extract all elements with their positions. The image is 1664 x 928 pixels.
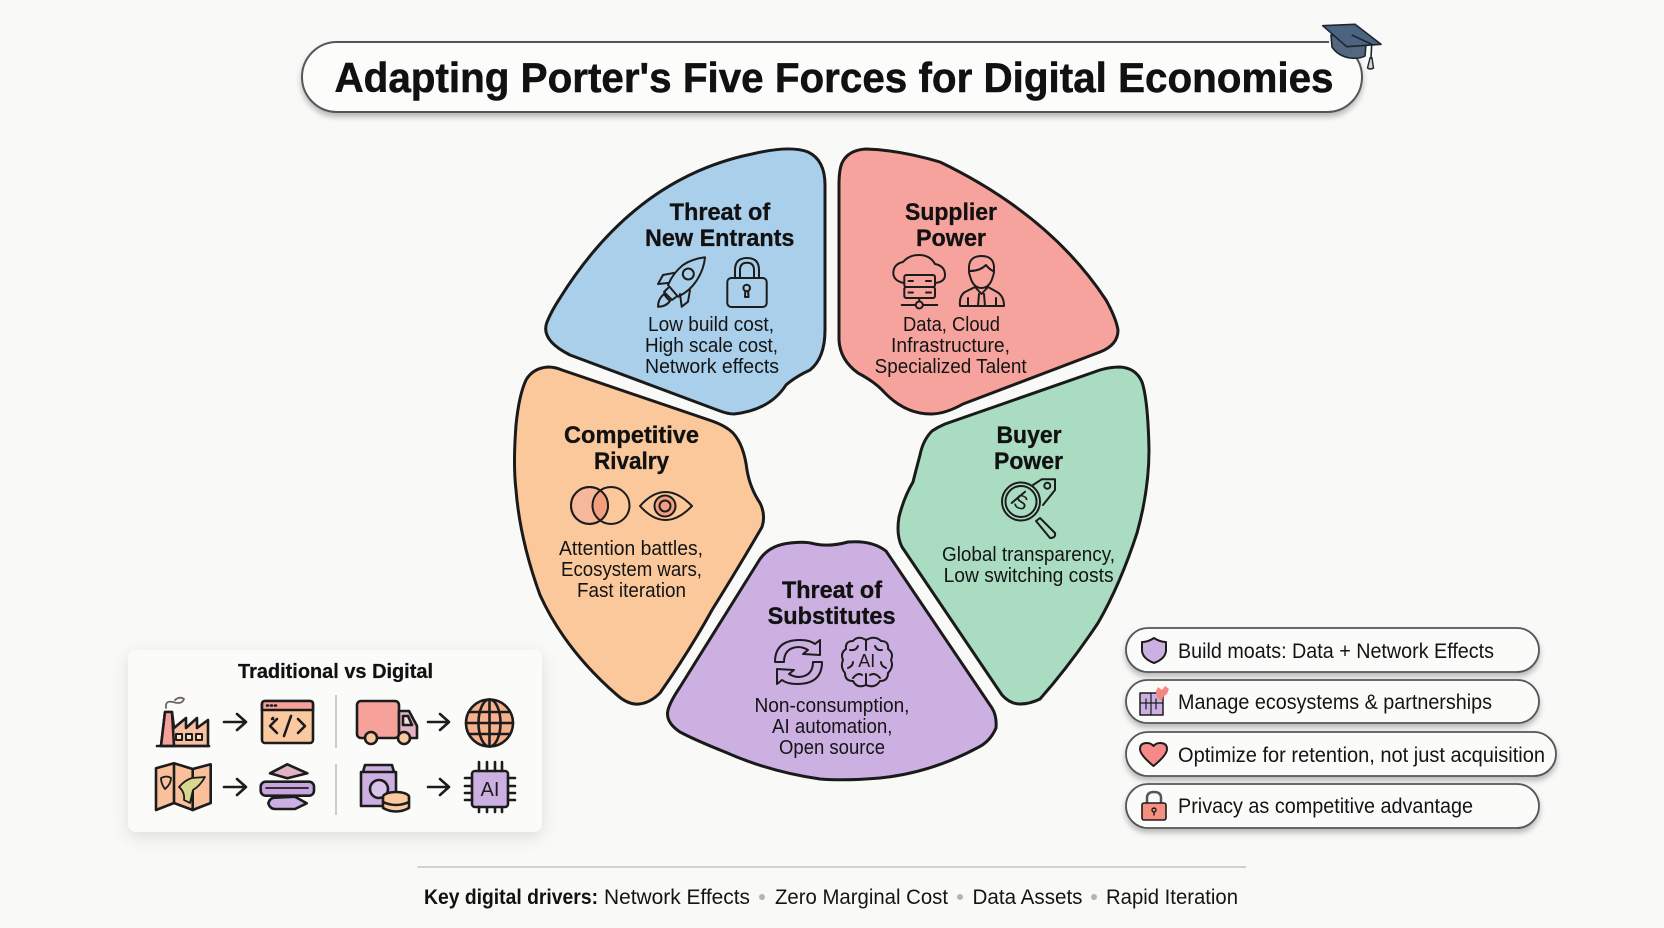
footer: key digital drivers: Data Assets (972, 886, 1082, 909)
heading: Competitive (564, 422, 699, 449)
body text (875, 314, 1027, 378)
body text: Data, Cloud (903, 314, 1000, 336)
callout text: Privacy as competitive advantage (1178, 794, 1473, 818)
panel: threat of new entrants (546, 149, 825, 414)
callout: build moats (1126, 628, 1539, 672)
icon: graduation cap (1323, 24, 1381, 69)
heading: New Entrants (645, 225, 794, 252)
callout text: Manage ecosystems & partnerships (1178, 690, 1492, 714)
icon: heart (1140, 743, 1167, 766)
title: Adapting Porter's Five Forces for Digital Economies (334, 54, 1334, 101)
icon: refresh arrows (775, 640, 822, 684)
footer: key digital drivers: Rapid Iteration (1106, 886, 1238, 909)
heading: Supplier (905, 199, 997, 226)
icon: padlock (727, 258, 767, 307)
icon: magnifier and price tag (1002, 479, 1055, 538)
icon: magnifier and price tag: S (1011, 490, 1031, 516)
heading (994, 422, 1063, 475)
panel: supplier power (839, 149, 1118, 414)
body text: Low switching costs (944, 565, 1114, 587)
body text: Low build cost, (648, 314, 774, 336)
heading (768, 577, 896, 630)
body text (645, 314, 779, 378)
body text: Fast iteration (577, 580, 686, 602)
icon: rocket (658, 257, 705, 307)
icon: data streams (261, 764, 314, 809)
heading: Threat of (782, 577, 883, 604)
icon: person (960, 256, 1004, 306)
icon: folded map (156, 763, 211, 810)
footer: key digital drivers: Zero Marginal Cost (775, 886, 948, 909)
heading: Rivalry (594, 448, 670, 475)
body text (754, 695, 910, 759)
title pill (302, 42, 1362, 112)
footer: key digital drivers: Key digital drivers: (424, 886, 598, 909)
icon: globe (466, 700, 513, 746)
callout text: Build moats: Data + Network Effects (1178, 639, 1494, 663)
body text: High scale cost, (645, 335, 778, 357)
heading (645, 199, 794, 252)
icon: shield (1142, 638, 1166, 663)
icon: AI chip (465, 762, 515, 812)
body text: Specialized Talent (875, 356, 1027, 378)
body text: AI automation, (772, 716, 892, 738)
panel: competitive rivalry (514, 367, 764, 704)
body text: Attention battles, (559, 538, 703, 560)
panel heading: Traditional vs Digital (238, 660, 433, 683)
body text: Open source (779, 737, 885, 759)
icon: package and coins (361, 765, 409, 812)
icon: cloud server (893, 255, 945, 308)
callout text: Optimize for retention, not just acquisition (1178, 743, 1545, 767)
heading (905, 199, 997, 252)
heading: Buyer (996, 422, 1062, 449)
arrow (428, 714, 449, 730)
heading: Power (916, 225, 986, 252)
callout: optimize retention (1126, 732, 1556, 776)
body text: Non-consumption, (754, 695, 910, 717)
callout: privacy (1126, 784, 1539, 828)
panel: traditional vs digital (128, 650, 542, 832)
arrow (428, 779, 449, 795)
heading: Threat of (670, 199, 771, 226)
divider (335, 695, 337, 815)
arrow (224, 779, 246, 795)
icon: padlock (1142, 792, 1166, 820)
heading (564, 422, 699, 475)
icon: eye (640, 492, 692, 520)
body text: Ecosystem wars, (561, 559, 702, 581)
icon: factory (157, 698, 209, 746)
icon: delivery truck (357, 701, 417, 744)
footer: key digital drivers: Network Effects (604, 886, 750, 909)
arrow (224, 714, 246, 730)
body text: Global transparency, (942, 544, 1115, 566)
icon: AI chip: AI (481, 779, 499, 801)
footer: key digital drivers (424, 886, 1238, 909)
body text: Network effects (645, 356, 779, 378)
icon: AI brain (842, 638, 892, 686)
icon: puzzle (1140, 686, 1169, 715)
callout: manage ecosystems (1126, 680, 1539, 723)
heading: Substitutes (768, 603, 896, 630)
body text (559, 538, 703, 602)
body text: Infrastructure, (891, 335, 1010, 357)
icon: code window (262, 701, 313, 743)
icon: overlapping circles (571, 487, 630, 524)
panel: threat of substitutes (668, 542, 996, 780)
heading: Power (994, 448, 1063, 475)
panel: buyer power (898, 367, 1149, 704)
icon: AI brain: AI (858, 651, 875, 671)
footer rule (418, 866, 1246, 868)
body text (942, 544, 1115, 587)
